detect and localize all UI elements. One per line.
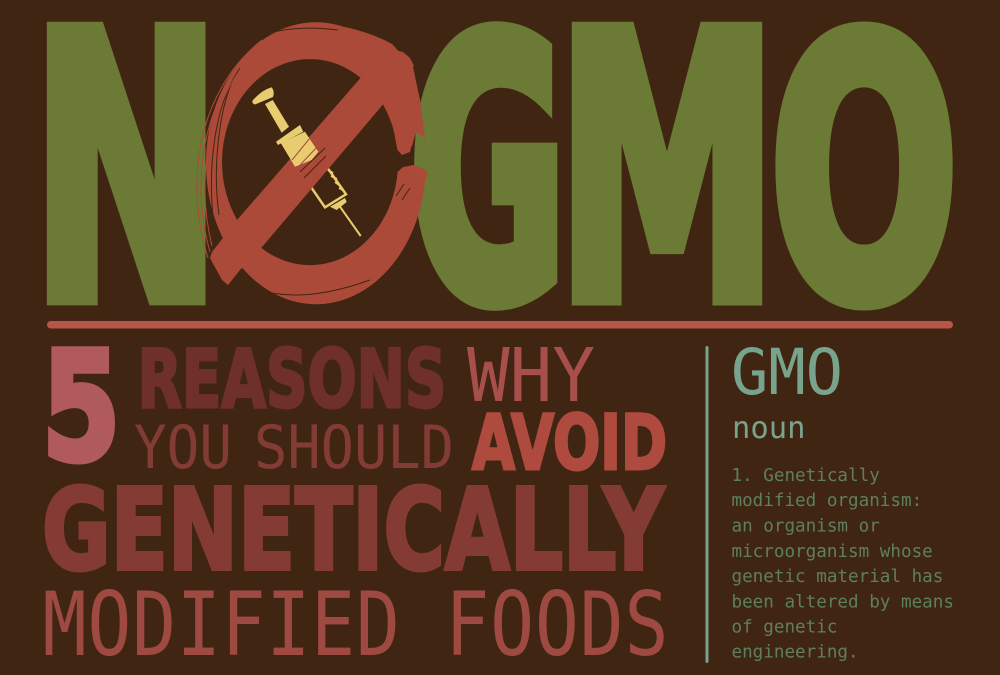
vertical divider (706, 346, 708, 663)
ring brush stroke (206, 22, 428, 304)
word GENETICALLY: GENETICALLY (42, 466, 665, 596)
definition text: engineering. (732, 642, 859, 662)
definition text: of genetic (732, 618, 837, 638)
panel: GMO definition (731, 336, 954, 662)
term GMO: GMO (731, 336, 843, 409)
brush streaks (211, 28, 410, 295)
word REASONS: REASONS (138, 333, 446, 426)
part of speech: noun (732, 411, 805, 446)
definition text: modified organism: (732, 491, 922, 511)
ring upper-right brush flare (345, 27, 425, 150)
words YOU SHOULD: YOU (134, 413, 232, 483)
words YOU SHOULD (134, 413, 454, 483)
icon: syringe upper part (252, 87, 318, 167)
heading: 5 reasons why you should avoid genetically modified foods (42, 321, 668, 675)
definition text: an organism or (732, 516, 880, 536)
icon: prohibition sign over syringe (197, 22, 428, 304)
title: NO GMO (31, 0, 959, 384)
words YOU SHOULD: SHOULD (254, 413, 454, 483)
divider bar (47, 321, 953, 328)
word AVOID: AVOID (472, 398, 667, 487)
definition text: microorganism whose (732, 542, 933, 562)
definition text: been altered by means (732, 592, 954, 612)
word WHY: WHY (467, 333, 595, 419)
definition text: 1. Genetically (732, 466, 880, 486)
icon: syringe lower part (307, 163, 361, 236)
definition text: genetic material has (732, 567, 943, 587)
slash brush stroke (210, 44, 414, 285)
words MODIFIED FOODS: MODIFIED FOODS (43, 574, 668, 675)
definition text (732, 466, 954, 662)
numeral 5: 5 (42, 321, 120, 495)
